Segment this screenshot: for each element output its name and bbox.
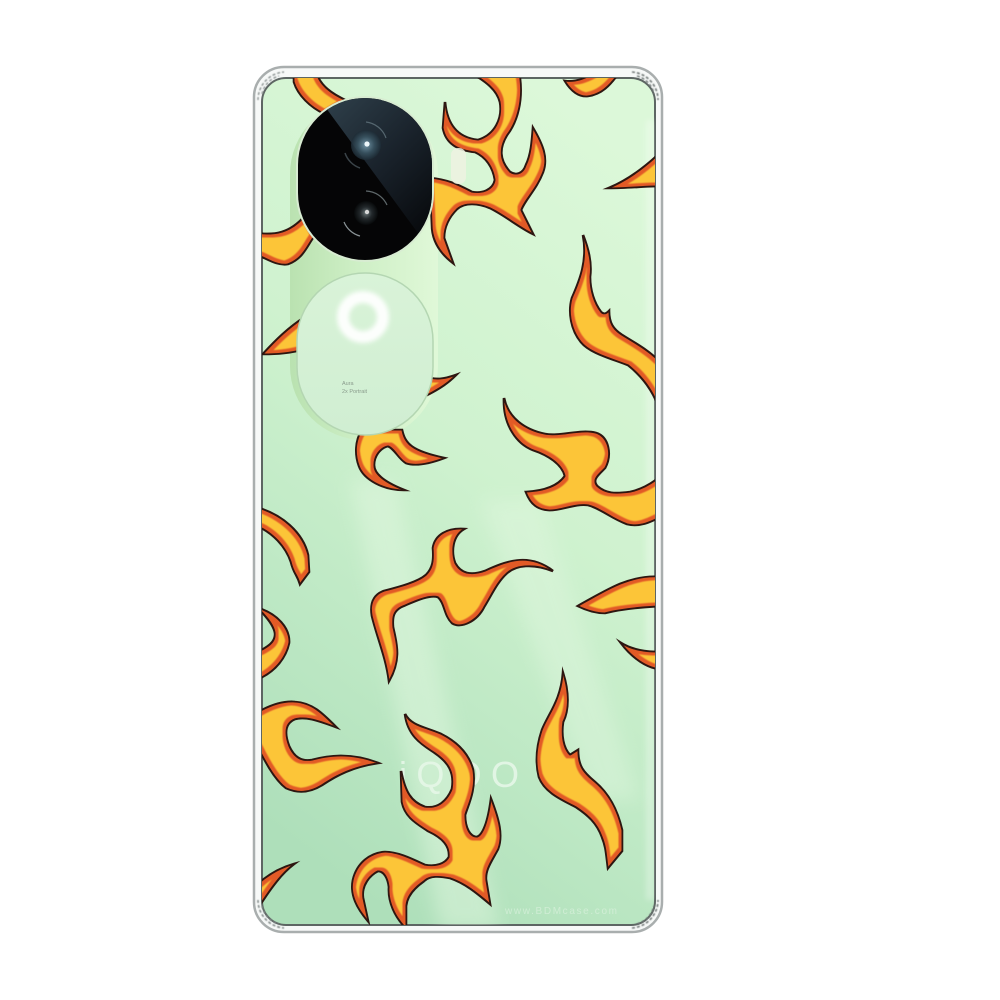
flame: below oval (356, 430, 444, 490)
flash window (451, 148, 466, 184)
flame: large right (570, 235, 660, 410)
case corner: top left (258, 72, 284, 100)
flame: top left (292, 78, 346, 113)
phone back panel (262, 78, 655, 930)
flame: right small (621, 643, 660, 669)
ring light (343, 297, 383, 337)
flame: left crescent (258, 608, 289, 679)
Aura light oval (297, 273, 433, 435)
flame: bottom left corner (258, 864, 294, 908)
flame: lower left hook (255, 702, 378, 791)
camera lens housing (296, 96, 434, 262)
flame: left edge (255, 507, 309, 584)
flame: right edge upper (609, 153, 660, 188)
camera island pill (290, 100, 438, 440)
lower lens (344, 191, 387, 236)
glass reflection (328, 98, 432, 234)
flame: bottom centre (352, 714, 500, 928)
case corner: bottom left (258, 900, 284, 928)
flame pattern (255, 70, 660, 928)
flame: right of oval (425, 375, 456, 396)
flame: top right (562, 78, 616, 98)
logo: iQOO: iQOO (399, 754, 519, 795)
upper lens (345, 122, 386, 168)
flame: right edge lower (578, 577, 660, 613)
flame: centre (371, 529, 553, 681)
flame: left of oval (263, 317, 305, 354)
case corner: top right (632, 72, 658, 100)
clear case outer bumper (254, 67, 662, 932)
oval caption: Aura (342, 381, 355, 387)
oval caption second line: 2x Portrait (342, 389, 368, 395)
flame: top centre (430, 72, 545, 263)
case corner: bottom right (632, 900, 658, 928)
phone case (254, 67, 662, 932)
flame: beside camera (262, 218, 314, 266)
flame: mid right (504, 398, 660, 525)
watermark: www.BDMcase.com (504, 906, 617, 917)
flame: lower right (537, 673, 622, 868)
